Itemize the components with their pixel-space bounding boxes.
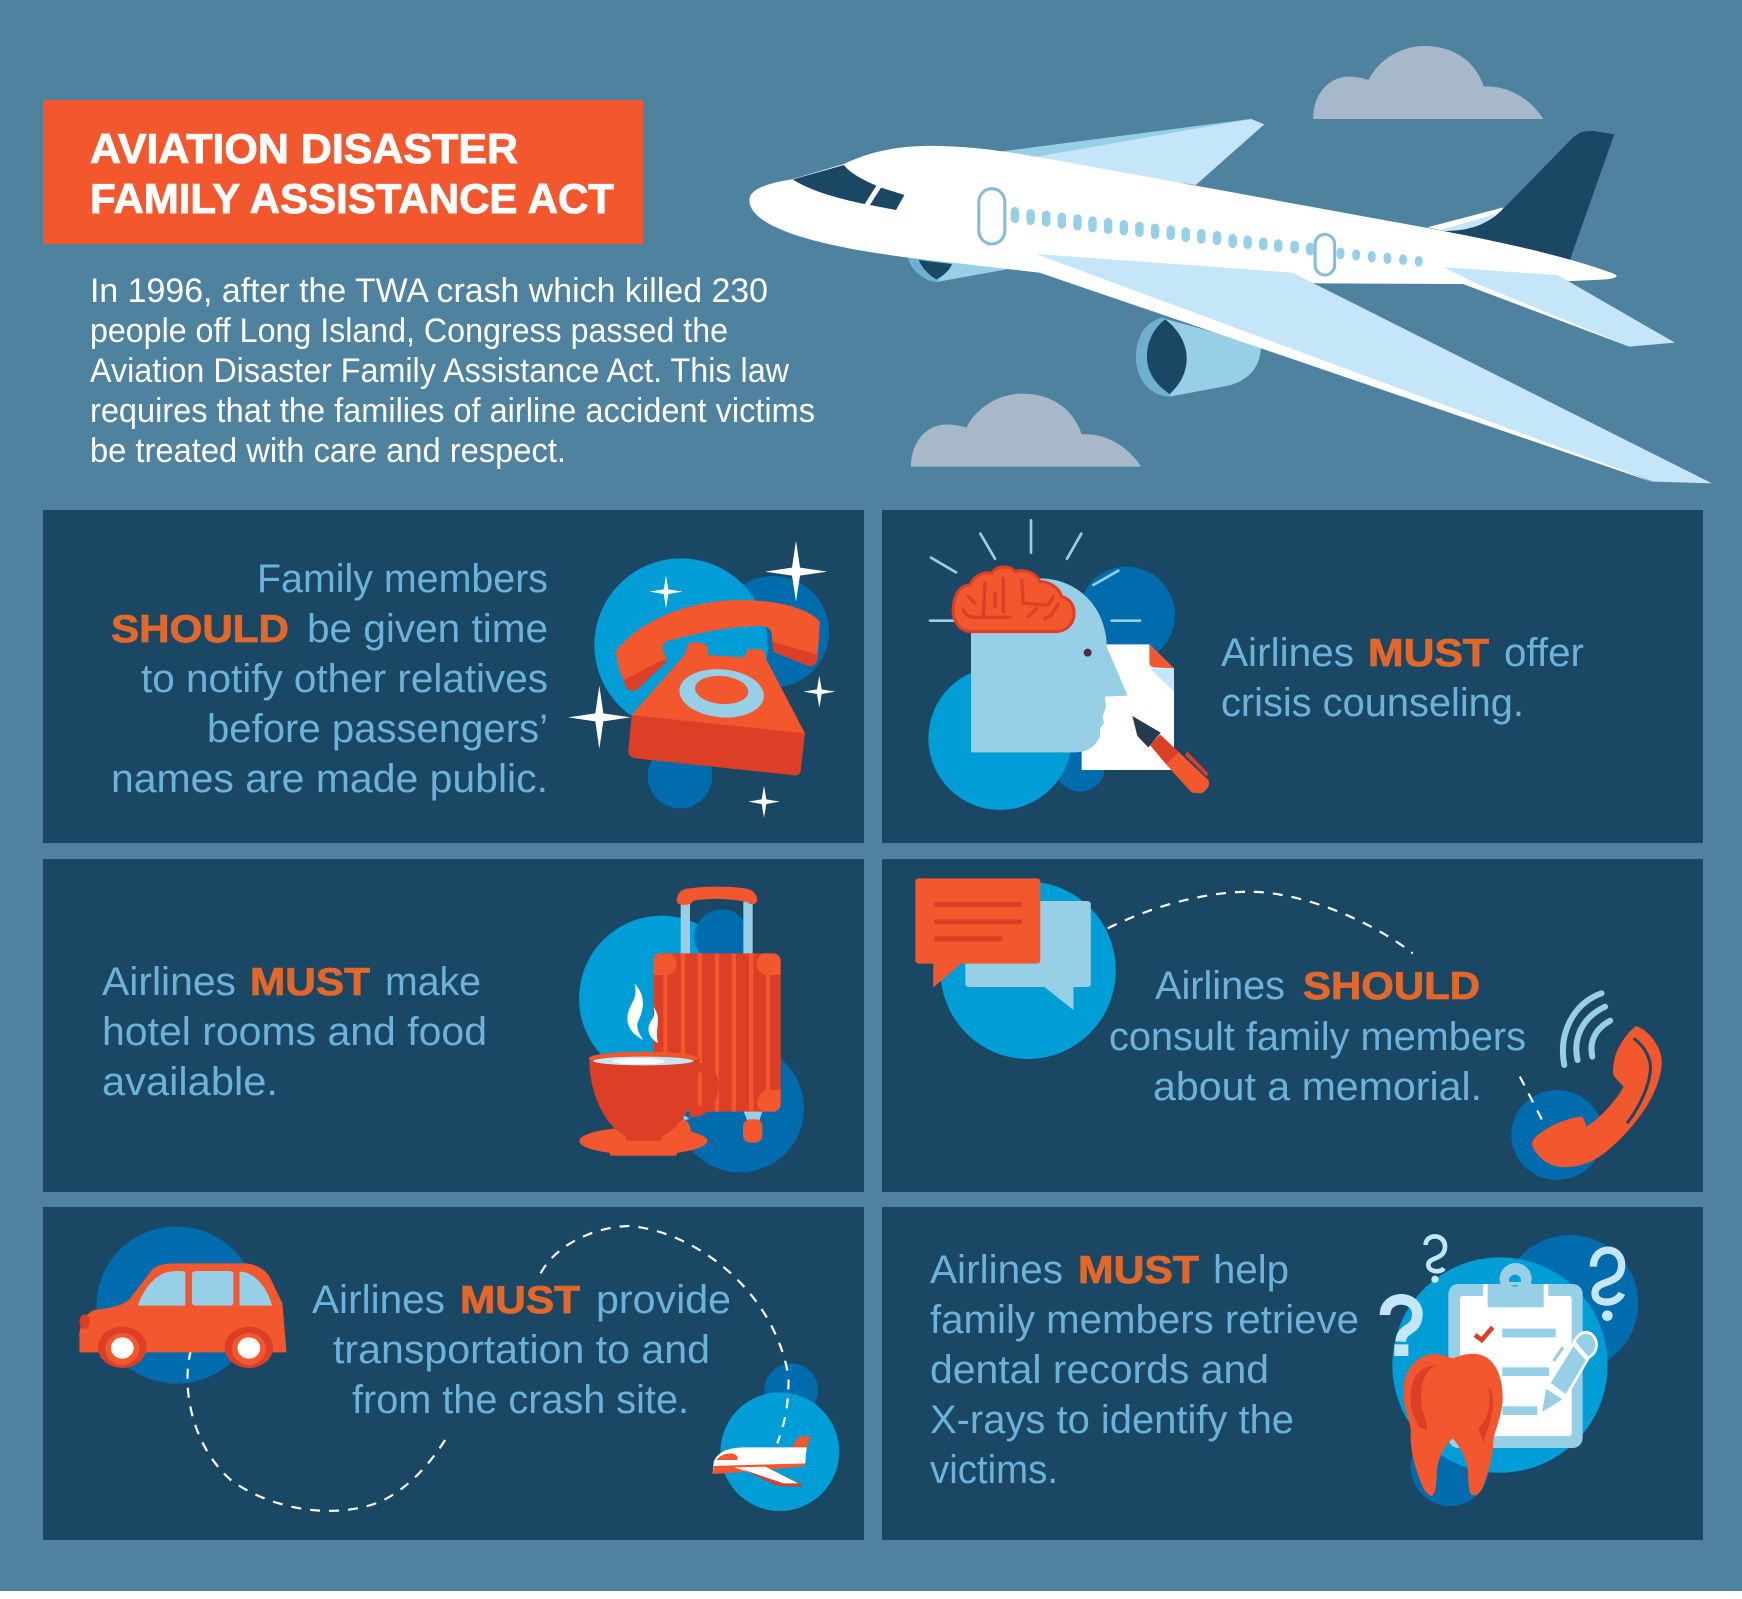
panel: family notification [43, 510, 864, 843]
panel text: dental records: victims. [930, 1448, 1058, 1492]
icon: speech bubbles, phone and dashed line [915, 878, 1662, 1180]
doors [979, 189, 1335, 275]
panel text: crisis counseling: Airlines [1221, 631, 1354, 675]
intro paragraph: Aviation Disaster Family Assistance Act. This law [90, 352, 789, 390]
panel text: notify relatives: Family members [257, 557, 548, 601]
panel text: crisis counseling: crisis counseling. [1221, 681, 1524, 725]
intro paragraph: be treated with care and respect. [90, 432, 566, 470]
panel text: hotel and food: make [385, 960, 481, 1004]
panel text: transportation [312, 1278, 731, 1422]
panel text: hotel and food: Airlines [102, 960, 236, 1004]
panel text: dental records [930, 1248, 1359, 1492]
icon: lower cloud [911, 394, 1141, 467]
title banner: AVIATION DISASTER [90, 125, 518, 172]
panel text: memorial consultation: Airlines [1155, 964, 1285, 1008]
panel text: notify relatives [111, 557, 548, 801]
panel text: memorial consultation: about a memorial. [1153, 1065, 1482, 1109]
tail fin [1427, 131, 1614, 262]
panel: crisis counseling [882, 510, 1703, 843]
panel: hotel and food [43, 859, 864, 1192]
airplane and clouds illustration [749, 46, 1712, 483]
panel text: crisis counseling: offer [1504, 631, 1584, 675]
panel: dental records [882, 1207, 1703, 1540]
icon: upper cloud [1313, 46, 1543, 119]
panel: memorial consultation [882, 859, 1703, 1192]
pencil on clipboard [1540, 1332, 1597, 1415]
panel text: dental records: X-rays to identify the [930, 1398, 1294, 1442]
panel text: hotel and food: hotel rooms and food [102, 1010, 487, 1054]
far wing [1000, 119, 1264, 185]
panel text: crisis counseling: MUST [1368, 632, 1489, 675]
panel text: transportation: from the crash site. [352, 1378, 689, 1422]
cockpit windows [793, 165, 904, 210]
panel: transportation [43, 1207, 864, 1540]
icon: head with brain and document [928, 520, 1209, 810]
intro paragraph: In 1996, after the TWA crash which killed 230 [90, 272, 768, 310]
panel text: notify relatives: to notify other relatives [141, 657, 548, 701]
panel text: notify relatives: names are made public. [111, 757, 548, 801]
intro paragraph: requires that the families of airline accident victims [90, 392, 815, 430]
title banner [43, 100, 643, 244]
near tail plane [1443, 267, 1675, 347]
icon: telephone with sparkles [568, 541, 835, 818]
panel text: dental records: Airlines [930, 1248, 1063, 1292]
panel text: dental records: help [1213, 1248, 1289, 1292]
far engine [908, 253, 1007, 282]
panel text: transportation: provide [596, 1278, 731, 1322]
icon: tooth, clipboard and question marks [1385, 1235, 1638, 1506]
intro paragraph: people off Long Island, Congress passed the [90, 312, 728, 350]
panel text: notify relatives: be given time [307, 607, 548, 651]
panel text: dental records: dental records and [930, 1348, 1269, 1392]
panel text: transportation: Airlines [312, 1278, 445, 1322]
panel text: hotel and food: available. [102, 1060, 278, 1104]
panel text: dental records: MUST [1078, 1249, 1199, 1292]
panel text: memorial consultation [1109, 964, 1526, 1109]
title banner: FAMILY ASSISTANCE ACT [90, 175, 614, 222]
panel text: notify relatives: SHOULD [111, 608, 289, 651]
panel text: hotel and food [102, 960, 487, 1104]
fuselage [749, 146, 1617, 284]
panel text: memorial consultation: SHOULD [1303, 965, 1480, 1008]
panel text: crisis counseling [1221, 631, 1584, 725]
near wing [1036, 254, 1712, 483]
panel text: dental records: family members retrieve [930, 1298, 1359, 1342]
intro paragraph [90, 272, 815, 470]
icon: suitcase and coffee cup [579, 887, 804, 1172]
passenger windows [1011, 207, 1423, 267]
panel text: memorial consultation: consult family members [1109, 1015, 1526, 1059]
icon: car, small plane and dashed route [79, 1226, 839, 1511]
panel text: transportation: MUST [460, 1279, 580, 1322]
near engine [1136, 317, 1261, 397]
panel text: hotel and food: MUST [250, 961, 370, 1004]
panel text: transportation: transportation to and [333, 1328, 710, 1372]
panel text: notify relatives: before passengers’ [207, 707, 548, 751]
